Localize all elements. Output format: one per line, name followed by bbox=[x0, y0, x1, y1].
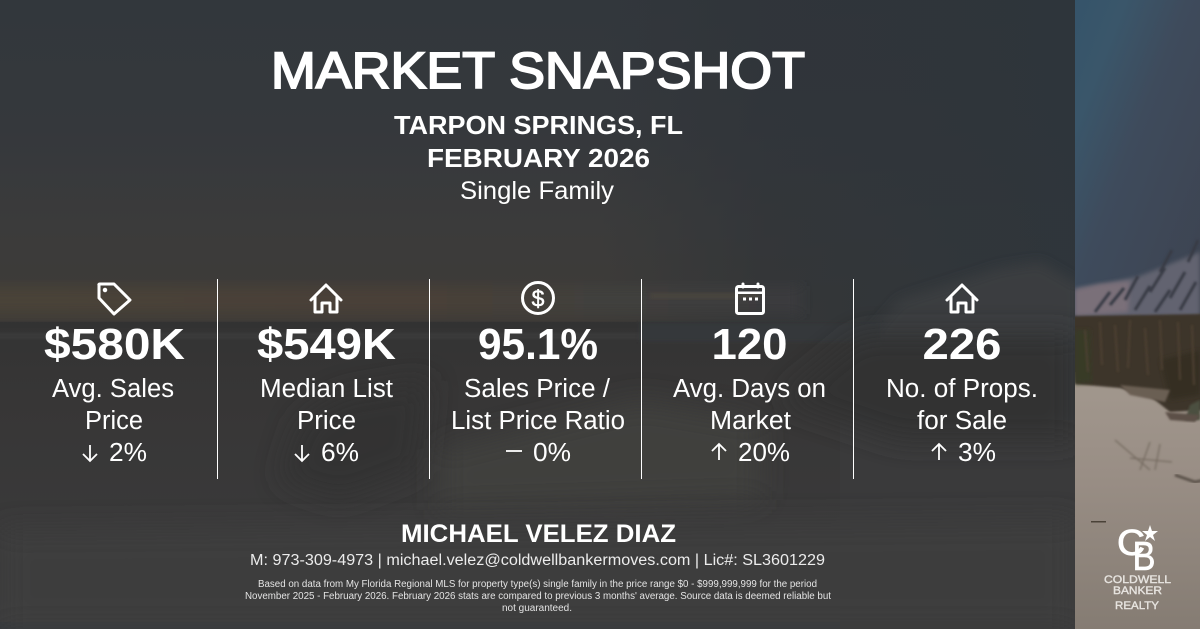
change bbox=[83, 439, 147, 467]
label line two: for Sale bbox=[917, 407, 1007, 435]
change bbox=[295, 439, 359, 467]
change: 6% bbox=[321, 439, 359, 467]
stat: median list price bbox=[257, 285, 396, 467]
agent contact details: M: 973-309-4973 | michael.velez@coldwellbankermoves.com | Lic#: SL3601229 bbox=[250, 552, 825, 569]
change bbox=[712, 439, 790, 467]
icon: price tag bbox=[99, 284, 130, 314]
change bbox=[932, 439, 996, 467]
change: 3% bbox=[958, 439, 996, 467]
icon: house bbox=[947, 285, 977, 312]
disclaimer bbox=[245, 579, 831, 614]
disclaimer: Based on data from My Florida Regional MLS for property type(s) single family in the price range $0 - $999,999,999 for the period bbox=[258, 579, 817, 590]
label: Avg. Sales bbox=[52, 375, 174, 403]
value: 120 bbox=[712, 320, 788, 369]
icon: house bbox=[311, 285, 341, 312]
divider bbox=[217, 279, 218, 479]
agent name: MICHAEL VELEZ DIAZ bbox=[401, 520, 676, 548]
change bbox=[506, 439, 571, 467]
label line two: Price bbox=[85, 407, 143, 435]
background photo: right beach strip bbox=[1070, 0, 1200, 629]
label line two: List Price Ratio bbox=[451, 407, 625, 435]
label: Median List bbox=[260, 375, 393, 403]
label line two: Market bbox=[710, 407, 791, 435]
stat: average days on market bbox=[673, 284, 826, 467]
property type: Single Family bbox=[460, 177, 614, 205]
value: $549K bbox=[257, 320, 396, 369]
icon: dollar circle bbox=[522, 282, 554, 314]
date heading: FEBRUARY 2026 bbox=[427, 143, 650, 173]
value: $580K bbox=[44, 320, 185, 369]
label: Avg. Days on bbox=[673, 375, 826, 403]
logo: Coldwell Banker Realty: BANKER bbox=[1113, 585, 1162, 597]
logo: Coldwell Banker Realty: REALTY bbox=[1115, 600, 1160, 612]
stat: number of properties for sale bbox=[886, 285, 1038, 467]
change: 20% bbox=[738, 439, 790, 467]
divider bbox=[429, 279, 430, 479]
stat: sales to list price ratio bbox=[451, 282, 625, 467]
logo: Coldwell Banker Realty: COLDWELL bbox=[1104, 574, 1171, 586]
title: MARKET SNAPSHOT bbox=[271, 42, 805, 99]
divider bbox=[853, 279, 854, 479]
disclaimer: not guaranteed. bbox=[502, 603, 572, 614]
icon: dollar circle: $ bbox=[532, 286, 545, 312]
divider bbox=[641, 279, 642, 479]
label: Sales Price / bbox=[464, 375, 611, 403]
label: No. of Props. bbox=[886, 375, 1038, 403]
logo: Coldwell Banker Realty bbox=[1104, 522, 1171, 612]
logo: Coldwell Banker Realty: B bbox=[1132, 533, 1156, 579]
disclaimer: November 2025 - February 2026. February 2026 stats are compared to previous 3 months' average. Source data is deemed reliable but bbox=[245, 591, 831, 602]
location heading: TARPON SPRINGS, FL bbox=[394, 110, 683, 140]
value: 95.1% bbox=[478, 320, 598, 369]
value: 226 bbox=[922, 320, 1002, 369]
change: 2% bbox=[109, 439, 147, 467]
icon: calendar bbox=[736, 284, 764, 314]
label line two: Price bbox=[297, 407, 356, 435]
background photo: darkened main panel bbox=[0, 0, 1075, 504]
change: 0% bbox=[533, 439, 571, 467]
logo: Coldwell Banker Realty: C bbox=[1117, 522, 1145, 563]
stat: average sales price bbox=[44, 284, 185, 467]
